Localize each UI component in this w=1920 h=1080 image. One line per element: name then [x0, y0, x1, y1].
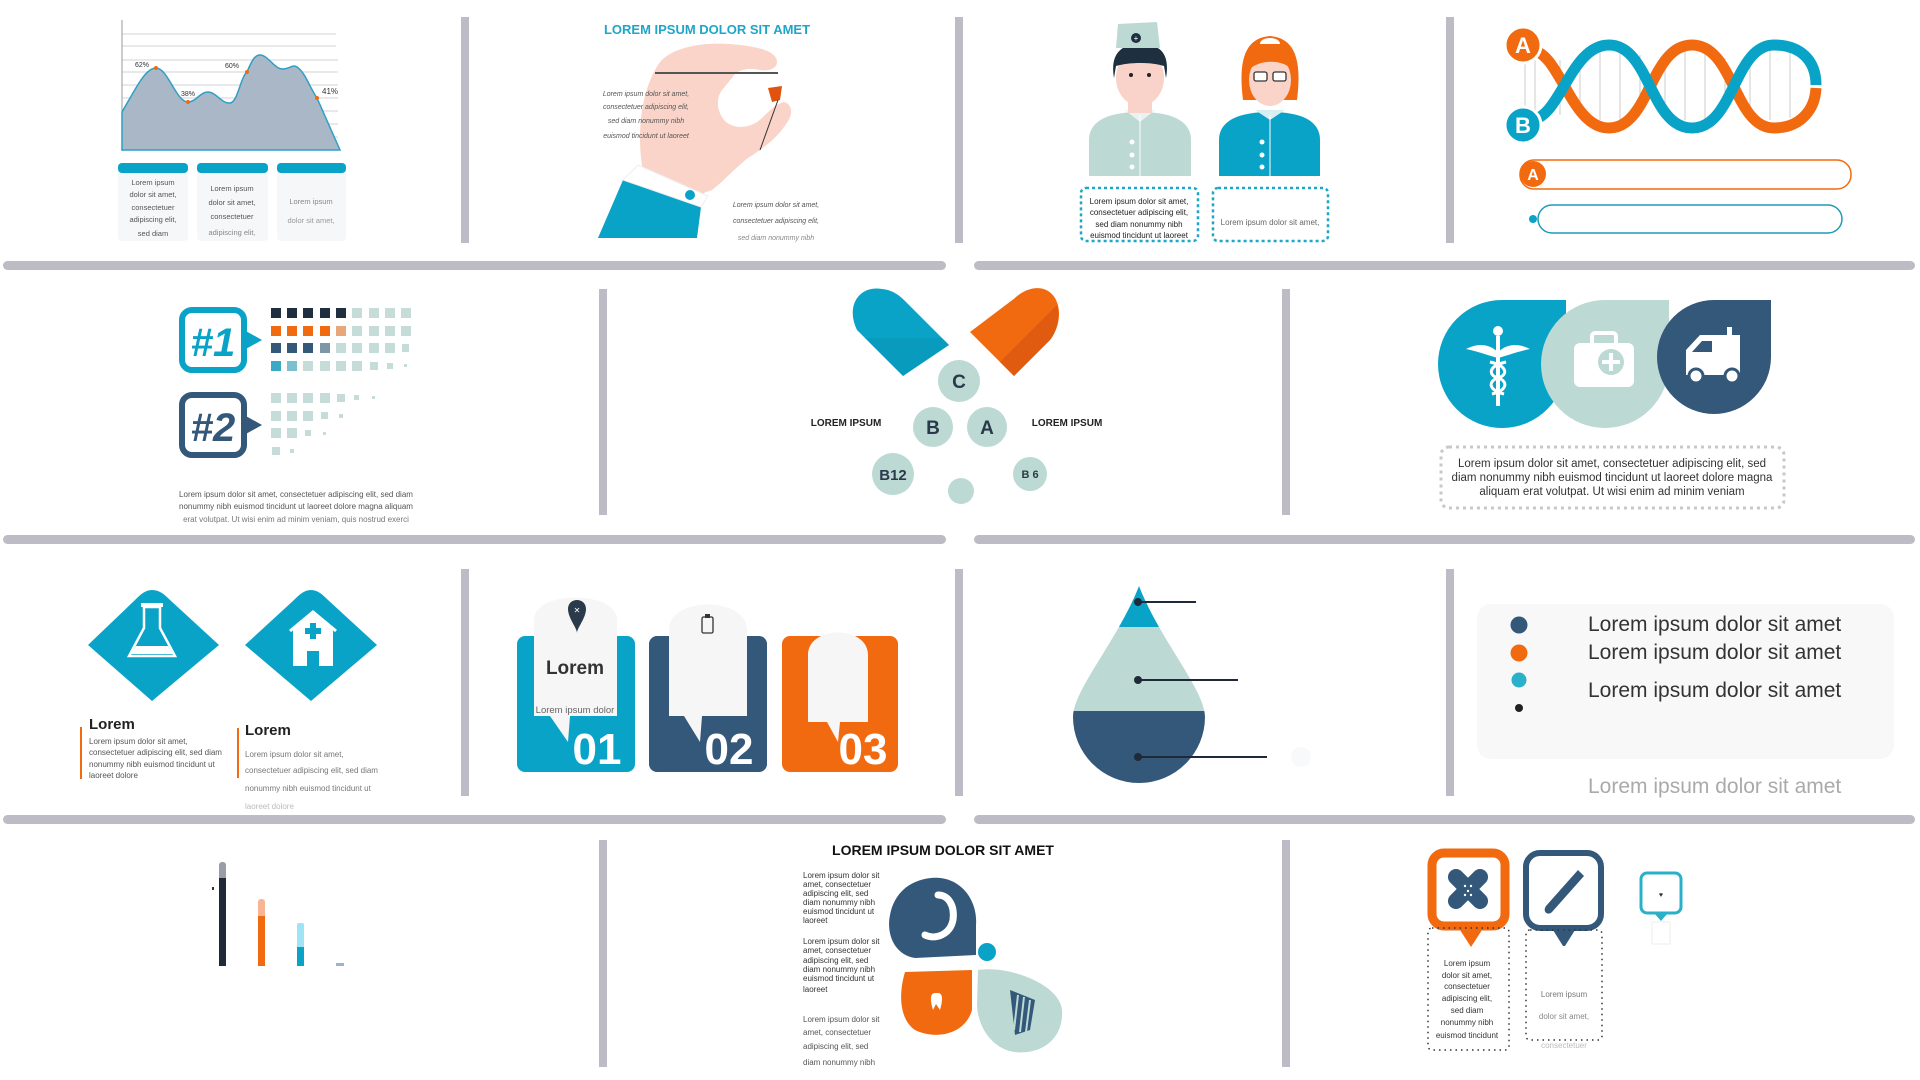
panel: medical drops: aliquam erat volutpat. Ut wisi enim ad minim veniam	[1479, 486, 1745, 498]
panel: doctors: Lorem ipsum dolor sit amet,	[1090, 197, 1188, 206]
text block 2: Lorem	[245, 722, 291, 739]
panel: organs: diam nonummy nibh	[803, 1058, 875, 1067]
cards: dolor sit amet,	[287, 216, 335, 225]
panel: area chart: 60%	[225, 63, 239, 70]
panel: medical pins: dolor sit amet,	[1442, 971, 1492, 980]
panel: medical drops: Lorem ipsum dolor sit amet, consectetuer adipiscing elit, sed	[1458, 458, 1766, 470]
panel: medical pins: Lorem ipsum	[1541, 990, 1587, 999]
text block 1: nonummy nibh euismod tincidunt ut	[89, 760, 216, 769]
panel: hand with pill: sed diam nonummy nibh	[738, 235, 814, 242]
text block 2: laoreet dolore	[245, 802, 294, 811]
panel: legend list: Lorem ipsum dolor sit amet	[1588, 613, 1841, 636]
card 03	[782, 632, 898, 774]
badge #2	[182, 395, 262, 455]
card 01: 01	[573, 725, 621, 774]
icon: hospital diamond	[245, 590, 377, 701]
panel: doctors	[1081, 22, 1328, 241]
panel: medical pins: dolor sit amet,	[1539, 1012, 1589, 1021]
panel: area chart: 38%	[181, 91, 195, 98]
panel: organs: Lorem ipsum dolor sit	[803, 937, 880, 946]
caption: Lorem ipsum dolor sit amet, consectetuer adipiscing elit, sed diam	[179, 490, 413, 499]
panel: organs: adipiscing elit, sed	[803, 1042, 868, 1051]
pill orange	[970, 288, 1059, 376]
panel: legend list: Lorem ipsum dolor sit amet	[1588, 679, 1841, 702]
panel: medical pins: nonummy nibh	[1441, 1018, 1493, 1027]
panel: vitamins: B 6	[1021, 469, 1039, 481]
panel: organs: laoreet	[803, 916, 828, 925]
panel: doctors: consectetuer adipiscing elit,	[1090, 208, 1188, 217]
area chart shape	[122, 55, 340, 150]
badge #2: #2	[191, 406, 235, 450]
panel: medical pins: Lorem ipsum	[1444, 959, 1490, 968]
doctor male	[1089, 22, 1191, 176]
icon: A label	[1505, 27, 1541, 63]
square grid	[271, 308, 411, 455]
cards: dolor sit amet,	[129, 190, 177, 199]
icon: ambulance drop	[1657, 300, 1771, 414]
card 01: Lorem ipsum dolor	[536, 705, 614, 716]
panel: organs: euismod tincidunt ut	[803, 974, 875, 983]
panel: vitamins: LOREM IPSUM	[811, 418, 881, 429]
panel: DNA	[1505, 27, 1851, 233]
pin: small heart: ♥	[1659, 892, 1663, 899]
hand	[640, 44, 791, 198]
panel: area chart: 62%	[135, 62, 149, 69]
panel: organs: euismod tincidunt ut	[803, 907, 875, 916]
heading: LOREM IPSUM DOLOR SIT AMET	[604, 22, 810, 37]
icon: caduceus drop	[1438, 300, 1566, 428]
panel: vitamins: B	[926, 418, 940, 439]
icon: flask diamond	[88, 590, 219, 701]
panel: medical pins	[1428, 853, 1681, 1050]
panel: hand with pill: euismod tincidunt ut laoreet	[603, 133, 690, 140]
bar B	[1529, 205, 1842, 233]
panel: organs	[803, 842, 1062, 1067]
text boxes	[1081, 188, 1198, 241]
panel: vitamins: LOREM IPSUM	[1032, 418, 1102, 429]
card 02: 02	[705, 725, 753, 774]
cards	[118, 163, 346, 241]
panel: legend list: Lorem ipsum dolor sit amet	[1588, 641, 1841, 664]
panel: doctors: sed diam nonummy nibh	[1095, 220, 1183, 229]
icon: tooth	[901, 970, 972, 1035]
caption: nonummy nibh euismod tincidunt ut laoreet dolore magna aliquam	[179, 502, 413, 511]
icon: B label	[1505, 107, 1541, 143]
sleeve	[598, 180, 701, 238]
panel: organs: amet, consectetuer	[803, 880, 871, 889]
text block 2: nonummy nibh euismod tincidunt ut	[245, 784, 372, 793]
panel: vitamins: A	[980, 418, 994, 439]
cards: consectetuer	[132, 203, 175, 212]
badge #1	[182, 310, 262, 370]
panel: organs: diam nonummy nibh	[803, 898, 875, 907]
cards: adipiscing elit,	[208, 228, 256, 237]
panel: medical drops	[1438, 300, 1784, 508]
card 01: Lorem	[546, 658, 604, 679]
panel: medical pins: adipiscing elit,	[1442, 994, 1492, 1003]
icon: stomach	[889, 878, 976, 958]
panel: medical pins: consectetuer	[1541, 1041, 1587, 1050]
dotted text boxes	[1428, 928, 1509, 1050]
panel: medical drops: diam nonummy nibh euismod tincidunt ut laoreet dolore magna	[1452, 472, 1773, 484]
cards: consectetuer	[211, 212, 254, 221]
text block 1: laoreet dolore	[89, 771, 138, 780]
panel: vitamins: C	[952, 372, 966, 393]
icon: A label: A	[1515, 33, 1531, 58]
panel: ranking squares	[179, 308, 413, 524]
panel: area chart: 41%	[322, 87, 338, 96]
card 01	[517, 598, 635, 774]
cards: Lorem ipsum	[131, 178, 175, 187]
panel: organs: adipiscing elit, sed	[803, 889, 868, 898]
panel: organs: Lorem ipsum dolor sit	[803, 1015, 880, 1024]
panel: hand with pill: Lorem ipsum dolor sit amet,	[733, 202, 819, 209]
text block 1: Lorem	[89, 716, 135, 733]
panel: numbered cards	[517, 598, 898, 774]
bar A	[1520, 160, 1851, 189]
panel: organs: LOREM IPSUM DOLOR SIT AMET	[832, 842, 1054, 858]
bar A: A	[1527, 167, 1539, 184]
icon: lungs	[977, 969, 1062, 1052]
card 02	[649, 604, 767, 774]
panel: legend list: Lorem ipsum dolor sit amet	[1588, 775, 1841, 798]
panel: organs: adipiscing elit, sed	[803, 956, 868, 965]
caption	[179, 490, 413, 524]
card 01: ✕	[574, 606, 580, 615]
panel: diamonds	[80, 590, 378, 811]
panel: medical pins: consectetuer	[1444, 982, 1490, 991]
cards: dolor sit amet,	[208, 198, 256, 207]
doctor female	[1219, 36, 1320, 176]
panel: organs: laoreet	[803, 985, 828, 994]
icon: B label: B	[1515, 113, 1531, 138]
panel: hand with pill: sed diam nonummy nibh	[608, 118, 684, 125]
panel: doctors: Lorem ipsum dolor sit amet,	[1221, 218, 1319, 227]
panel: hand with pill: consectetuer adipiscing elit,	[733, 218, 819, 225]
cards: Lorem ipsum	[289, 197, 333, 206]
panel: hand with pill: consectetuer adipiscing elit,	[603, 104, 689, 111]
cards: adipiscing elit,	[129, 215, 177, 224]
panel: bar chart	[212, 862, 344, 966]
text block 2: consectetuer adipiscing elit, sed diam	[245, 766, 378, 775]
text block 1	[80, 716, 222, 780]
pin: thermometer	[1526, 853, 1601, 946]
doctor male: +	[1134, 34, 1139, 43]
panel: medical pins: sed diam	[1451, 1006, 1484, 1015]
panel: droplet chart	[1073, 586, 1267, 783]
panel: vitamins	[811, 288, 1102, 504]
dashed text box	[1441, 447, 1784, 508]
panel: organs: amet, consectetuer	[803, 946, 871, 955]
card 03: 03	[839, 725, 887, 774]
icon: medkit drop	[1541, 300, 1669, 428]
cards: sed diam	[138, 229, 168, 238]
panel: hand with pill	[598, 22, 819, 242]
panel: organs: Lorem ipsum dolor sit	[803, 871, 880, 880]
text block 1: Lorem ipsum dolor sit amet,	[89, 737, 188, 746]
pin: bandage	[1432, 853, 1505, 947]
caption: erat volutpat. Ut wisi enim ad minim veniam, quis nostrud exerci	[183, 515, 409, 524]
panel: hand with pill: Lorem ipsum dolor sit amet,	[603, 91, 689, 98]
panel: medical pins: euismod tincidunt	[1436, 1031, 1499, 1040]
text block 2	[237, 722, 378, 811]
panel: legend list	[1477, 604, 1894, 798]
panel: doctors: euismod tincidunt ut laoreet	[1090, 231, 1189, 240]
badge #1: #1	[191, 321, 235, 365]
pill teal	[853, 288, 949, 376]
cards: Lorem ipsum	[210, 184, 254, 193]
text block 2: Lorem ipsum dolor sit amet,	[245, 750, 344, 759]
panel: vitamins: B12	[879, 467, 907, 484]
panel: area chart	[118, 20, 346, 241]
panel: organs: amet, consectetuer	[803, 1028, 871, 1037]
pin: small heart	[1641, 873, 1681, 944]
text block 1: consectetuer adipiscing elit, sed diam	[89, 748, 222, 757]
panel: organs: diam nonummy nibh	[803, 965, 875, 974]
